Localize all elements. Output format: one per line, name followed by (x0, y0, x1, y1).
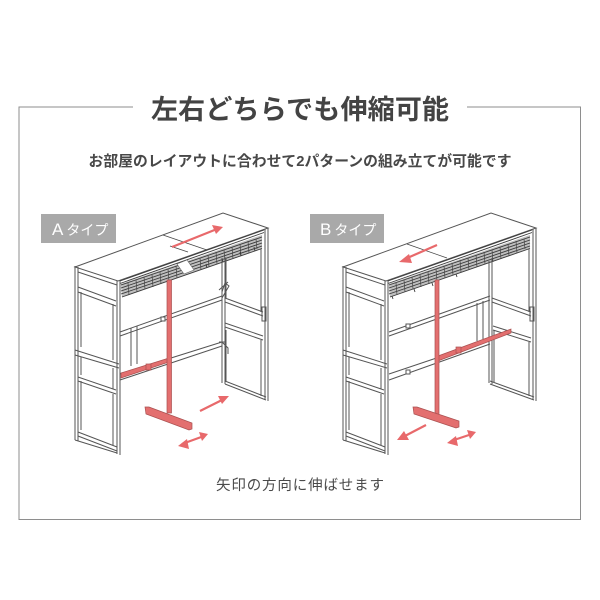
arrow: top panel extends right (172, 225, 223, 247)
left side frame (343, 266, 388, 455)
badge: A type (41, 214, 116, 243)
left side frame (75, 266, 120, 455)
top panel (343, 213, 536, 281)
pink telescoping pole (121, 280, 192, 430)
badge: B type (310, 214, 384, 243)
top panel (75, 213, 268, 281)
badge: A type: Aタイプ (52, 220, 108, 239)
subtitle: お部屋のレイアウトに合わせて2パターンの組み立てが可能です (88, 152, 512, 170)
wire shelf (120, 230, 264, 297)
caption: 矢印の方向に伸ばせます (216, 477, 384, 494)
arrow: base double-headed (447, 430, 476, 446)
arrow: base extends left (397, 425, 426, 440)
badge: B type: Bタイプ (320, 220, 376, 239)
back rails (120, 296, 222, 380)
panel: type A (41, 213, 268, 455)
arrow: base extends right (200, 396, 229, 411)
right side frame (219, 228, 268, 401)
arrow: base double-headed (178, 432, 208, 449)
rack illustration A (75, 213, 268, 455)
right side frame (489, 228, 536, 401)
pink telescoping pole (413, 280, 511, 428)
outer frame (19, 107, 580, 520)
title: 左右どちらでも伸縮可能 (151, 95, 449, 125)
wire shelf (388, 230, 532, 299)
panel: type B (310, 213, 536, 455)
rack illustration B (343, 213, 536, 455)
arrow: top panel extends left (399, 245, 437, 263)
back rails (389, 296, 490, 380)
